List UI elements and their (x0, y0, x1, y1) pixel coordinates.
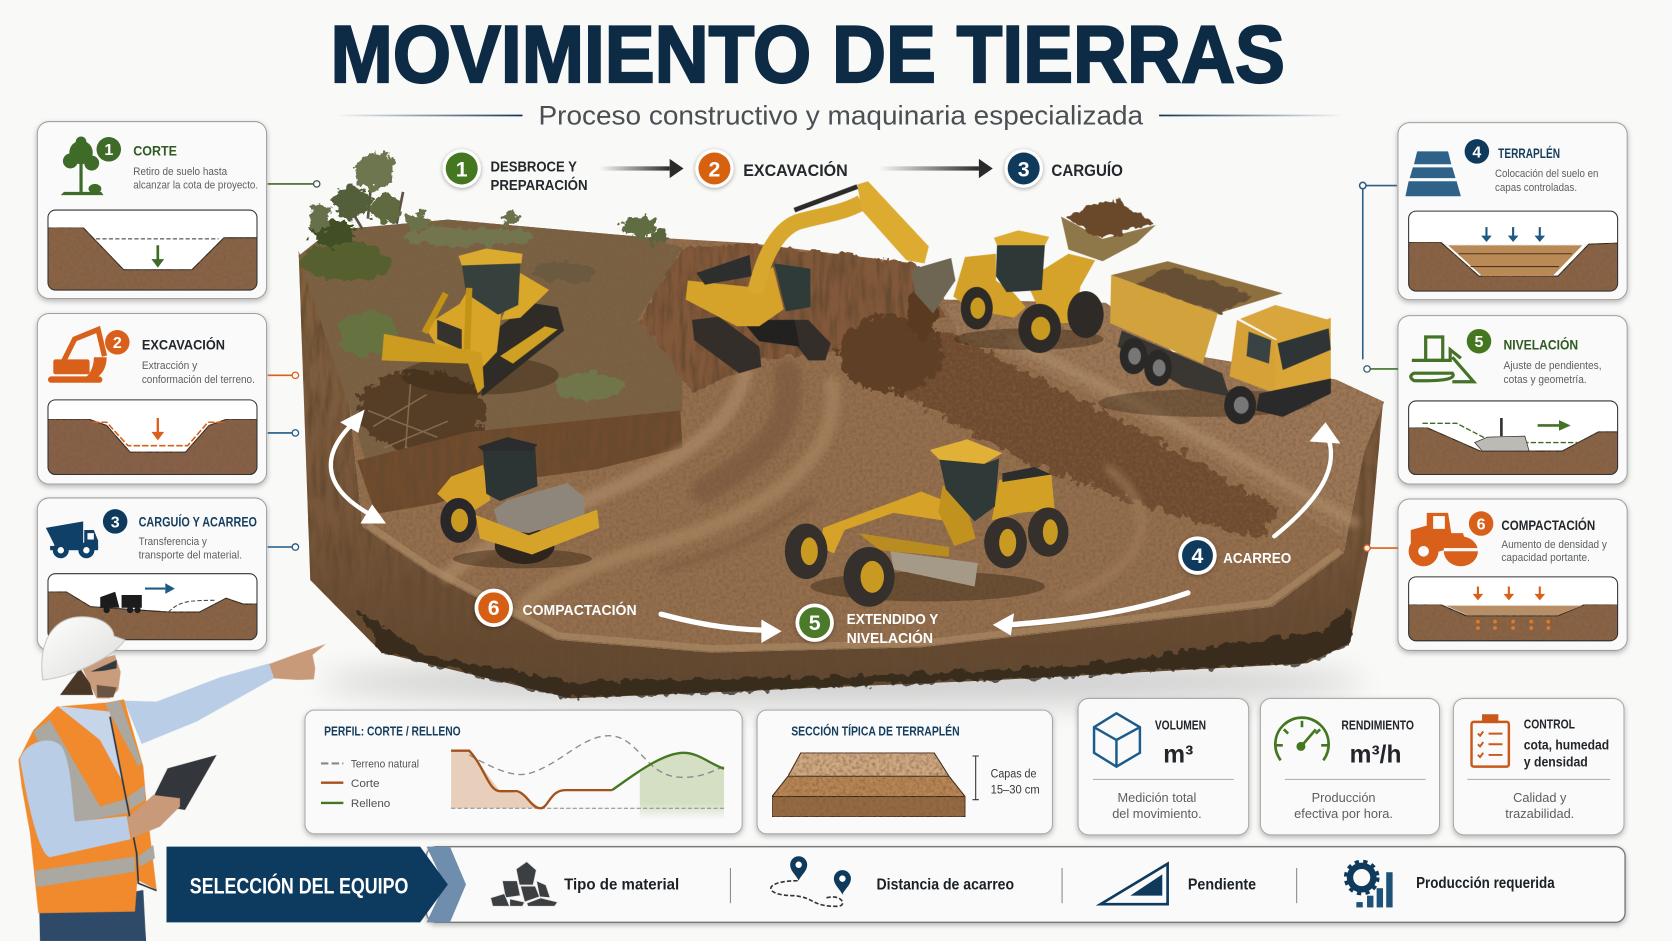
section diagram (48, 228, 256, 290)
arrow 1 to 2 (599, 159, 684, 178)
neck and face (80, 655, 121, 698)
top step 1 (443, 149, 588, 194)
terrain step badge 5: EXTENDIDO Y (847, 611, 938, 628)
step number (103, 509, 127, 534)
profile chart (451, 736, 724, 820)
card 2 connectors (268, 372, 299, 436)
description: Extracción y (142, 360, 198, 372)
machine: bulldozer (382, 248, 564, 397)
legend: Corte (351, 778, 380, 790)
tablet (150, 755, 217, 810)
metric note: del movimiento. (1112, 806, 1202, 821)
description: conformación del terreno. (142, 374, 255, 386)
step number: 1 (104, 142, 113, 159)
icon: cube (1094, 713, 1140, 767)
metric card: rendimiento (1260, 698, 1440, 835)
holding hand (127, 795, 180, 838)
item: tipo de material (491, 862, 679, 906)
item: produccion requerida (1346, 862, 1555, 907)
excavation back wall (640, 243, 947, 392)
icon: roller (1409, 513, 1478, 566)
metric detail (1524, 737, 1609, 770)
card 6: compactacion (1398, 499, 1627, 650)
machine: excavator (686, 181, 955, 373)
raised arm (124, 663, 274, 744)
soil block side faces (299, 251, 1383, 698)
description (1495, 168, 1598, 194)
metric detail: y densidad (1524, 754, 1588, 770)
step number: 2 (113, 335, 122, 352)
card 2: excavacion (37, 313, 267, 484)
metric note: Calidad y (1513, 790, 1567, 805)
right cut bank (842, 333, 1280, 538)
metric card: control (1453, 698, 1624, 835)
step number (97, 137, 121, 162)
card 3 connector (268, 544, 299, 550)
section diagram (1409, 227, 1618, 291)
top step 2: EXCAVACIÓN (743, 161, 848, 180)
description: Transferencia y (139, 536, 207, 548)
legend (321, 759, 419, 810)
top step 1: PREPARACIÓN (491, 176, 588, 194)
metric note: efectiva por hora. (1294, 806, 1393, 821)
metric note: Producción (1312, 790, 1376, 805)
item: pendiente: Pendiente (1188, 876, 1256, 893)
glasses (91, 660, 117, 672)
description (139, 536, 242, 562)
icon: excavator (48, 329, 107, 383)
metric card: volumen (1078, 698, 1249, 835)
arrow heads (340, 409, 1340, 643)
metric detail: cota, humedad (1524, 737, 1609, 753)
earthworks site diorama (299, 152, 1384, 706)
step number: 5 (1475, 334, 1484, 351)
icon: tree (61, 136, 103, 195)
hard hat (42, 617, 125, 680)
machine: motor grader (785, 439, 1068, 607)
item: distancia de acarreo (771, 856, 1014, 906)
metric heading: CONTROL (1524, 716, 1575, 731)
layer thickness dimension: 15–30 cm (991, 783, 1040, 796)
jeans (39, 890, 146, 941)
description: alcanzar la cota de proyecto. (133, 180, 258, 192)
item: pendiente (1100, 864, 1256, 904)
panel heading: PERFIL: CORTE / RELLENO (324, 724, 461, 739)
trees (309, 152, 670, 245)
step number: 3 (111, 514, 120, 531)
step number (1469, 511, 1493, 536)
card 5: nivelacion (1398, 316, 1627, 484)
card 5 connector (1364, 366, 1398, 372)
description: Aumento de densidad y (1501, 539, 1608, 551)
step number: 6 (1477, 516, 1486, 533)
terrace bank (357, 411, 682, 514)
ground shadow (320, 659, 1365, 706)
section diagram (48, 583, 256, 640)
arrow 2 to 3 (879, 159, 993, 178)
top step 3 (1004, 149, 1123, 188)
terrain step badge 5: 5 (809, 611, 821, 635)
sandy rim (368, 525, 1340, 648)
description (1501, 539, 1608, 564)
equipment selection bar (166, 847, 1625, 922)
top step 3: CARGUÍO (1051, 161, 1123, 180)
machine: compactor roller (437, 437, 599, 568)
metric heading: RENDIMIENTO (1341, 717, 1414, 732)
tyre tracks (448, 341, 1354, 608)
top step 2: 2 (709, 157, 720, 181)
description (142, 360, 255, 386)
layer thickness dimension (972, 756, 1040, 800)
metric note: Medición total (1118, 790, 1196, 805)
machine: wheel loader (953, 200, 1156, 353)
terrain step badge 5: NIVELACIÓN (847, 629, 933, 647)
metric note (1294, 790, 1393, 821)
panel: typical embankment section (757, 710, 1052, 834)
step number (105, 330, 130, 355)
legend: Relleno (351, 798, 390, 810)
metric heading: VOLUMEN (1155, 717, 1206, 732)
icon: dump truck (46, 521, 98, 558)
card 1: corte (37, 122, 267, 299)
road surface upper (944, 303, 1384, 538)
icon: checklist clipboard (1472, 715, 1509, 767)
item: produccion requerida: Producción requerida (1416, 875, 1555, 892)
spoil pile (837, 316, 944, 392)
terrain step badge 6 (475, 589, 637, 627)
terrain step badge 4: 4 (1192, 544, 1204, 568)
terrain step badge 6: 6 (488, 596, 500, 620)
process flow arrows (331, 424, 1331, 630)
step number (1467, 329, 1491, 353)
terrain step badge 5 (795, 604, 938, 647)
pointing hand (269, 644, 326, 680)
description (133, 166, 258, 192)
top step 2 (695, 149, 848, 188)
card 4: terraplen (1398, 123, 1627, 300)
panel heading: SECCIÓN TÍPICA DE TERRAPLÉN (791, 724, 960, 739)
safety vest (18, 699, 157, 913)
step number: 4 (1472, 144, 1481, 161)
top step 1: DESBROCE Y (491, 159, 577, 176)
heading: EXCAVACIÓN (142, 336, 225, 353)
dark soil band (357, 608, 1352, 698)
legend: Terreno natural (351, 759, 419, 771)
section diagram (48, 418, 256, 474)
item: tipo de material: Tipo de material (564, 876, 679, 893)
layer thickness dimension: Capas de (991, 767, 1036, 780)
description: Ajuste de pendientes, (1504, 360, 1602, 372)
terrain top surface (299, 220, 1384, 653)
section diagram (1409, 418, 1618, 474)
engineer figure (18, 617, 326, 941)
card 3: carguio y acarreo (37, 498, 267, 650)
metric unit: m³/h (1350, 741, 1401, 768)
banner (166, 847, 466, 922)
title: MOVIMIENTO DE TIERRAS (331, 10, 1285, 100)
description: Colocación del suelo en (1495, 168, 1598, 180)
description: Retiro de suelo hasta (133, 166, 227, 178)
metric note (1505, 790, 1574, 821)
embankment layers (772, 753, 965, 817)
top step 3: 3 (1018, 157, 1030, 181)
description: transporte del material. (139, 550, 242, 562)
heading: COMPACTACIÓN (1501, 516, 1595, 533)
icon: bulldozer (1411, 337, 1474, 382)
card 6 connector (1364, 545, 1398, 551)
item: distancia de acarreo: Distancia de acarreo (877, 876, 1014, 893)
panel: cut and fill profile (305, 710, 742, 834)
heading: CARGUÍO Y ACARREO (139, 514, 257, 530)
description: cotas y geometría. (1504, 374, 1587, 386)
step number (1465, 139, 1489, 164)
metric unit: m³ (1163, 741, 1193, 768)
machine: dump truck (1098, 261, 1331, 424)
heading: TERRAPLÉN (1498, 145, 1560, 161)
heading: CORTE (133, 143, 177, 159)
terrain step badge 4 (1178, 536, 1291, 575)
section diagram (1409, 586, 1618, 640)
terrain step badge 4: ACARREO (1223, 550, 1291, 567)
subtitle: Proceso constructivo y maquinaria especializada (538, 101, 1143, 131)
description: capacidad portante. (1501, 552, 1590, 564)
icon: embankment layers (1405, 151, 1461, 196)
card 1 connector (268, 181, 320, 187)
top step 1: 1 (456, 157, 468, 181)
metric note: trazabilidad. (1505, 806, 1574, 821)
description (1504, 360, 1602, 386)
icon: gauge (1275, 718, 1329, 760)
terrain step badge 6: COMPACTACIÓN (522, 601, 637, 619)
metric note (1112, 790, 1202, 821)
card 4 connector (1360, 182, 1397, 359)
lower arm sleeve (20, 740, 131, 857)
heading: NIVELACIÓN (1504, 336, 1578, 353)
banner: SELECCIÓN DEL EQUIPO (190, 874, 408, 899)
description: capas controladas. (1495, 182, 1577, 194)
cleared plateau with vegetation (299, 220, 682, 469)
